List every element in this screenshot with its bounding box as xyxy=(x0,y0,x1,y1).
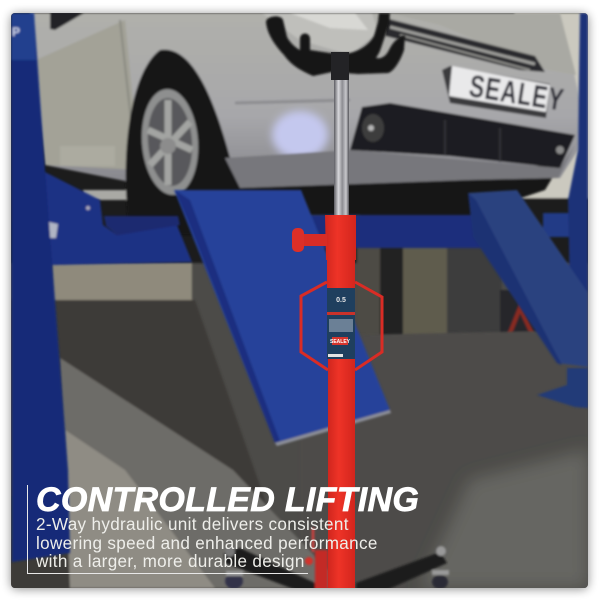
red jack body: 0.5 xyxy=(336,297,346,304)
hexagon carry handle xyxy=(301,282,382,370)
number plate xyxy=(442,66,550,118)
caption frame line xyxy=(27,485,308,574)
right base plate xyxy=(537,368,588,408)
left leg xyxy=(224,548,315,590)
left pillar xyxy=(11,13,70,562)
workshop background xyxy=(11,13,588,367)
caption heading: CONTROLLED LIFTING xyxy=(36,481,419,519)
lift structure: P xyxy=(12,25,20,39)
sill pipes xyxy=(83,190,147,200)
caption body text: with a larger, more durable design xyxy=(36,552,305,571)
centre ramp xyxy=(174,190,390,443)
red jack body: SEALEY xyxy=(330,339,351,345)
door seam xyxy=(118,20,132,116)
bonnet xyxy=(406,14,576,75)
wheel rim xyxy=(138,87,202,197)
caption body text: lowering speed and enhanced performance xyxy=(36,534,378,553)
right leg xyxy=(356,552,447,590)
right ramp xyxy=(468,190,588,367)
upper grille xyxy=(385,18,545,72)
plate text: SEALEY xyxy=(467,68,567,118)
bumper highlight xyxy=(272,111,328,159)
lower air intake xyxy=(350,103,575,168)
right lift pillar xyxy=(568,13,588,300)
upper cylinder xyxy=(325,215,356,288)
lift cross arm xyxy=(45,172,192,265)
headlamp xyxy=(262,13,378,55)
car body xyxy=(30,13,580,185)
casters xyxy=(224,576,244,588)
lower bumper xyxy=(225,145,575,188)
main tube xyxy=(328,358,355,590)
caption body text: 2-Way hydraulic unit delivers consistent xyxy=(36,515,349,534)
floor xyxy=(11,263,588,600)
jack saddle xyxy=(266,13,405,216)
saddle collar xyxy=(331,52,349,80)
chrome ram xyxy=(334,80,349,216)
side window xyxy=(50,13,84,30)
under-car shadow xyxy=(225,165,560,215)
red jack body xyxy=(292,215,382,590)
car xyxy=(30,13,580,235)
rear cross beam xyxy=(300,215,490,248)
valve knob xyxy=(303,234,327,246)
pump lever xyxy=(315,550,328,590)
jack base xyxy=(224,528,449,590)
product label xyxy=(327,288,355,359)
caption body text xyxy=(36,515,378,571)
wheel arch xyxy=(126,50,245,235)
